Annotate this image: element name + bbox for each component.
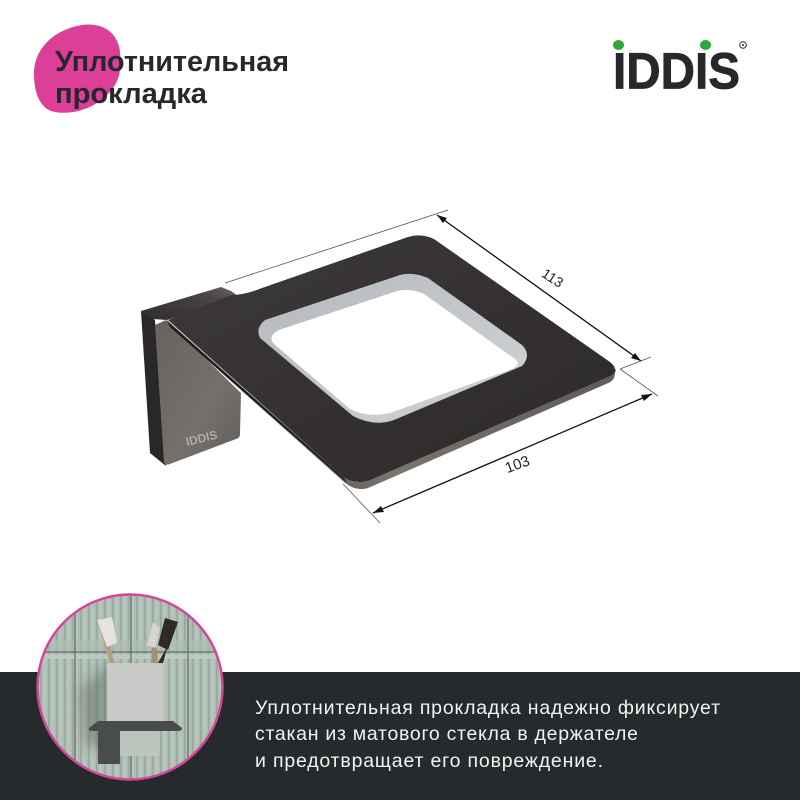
logo: IDDIS: IDDIS bbox=[613, 42, 740, 100]
glass cup bbox=[107, 663, 163, 725]
bracket top bbox=[141, 287, 238, 320]
title bbox=[55, 46, 289, 110]
dimension 113: 113 bbox=[539, 265, 567, 291]
bottom dark band bbox=[0, 672, 800, 800]
toothbrush middle bbox=[151, 647, 158, 663]
description text: стакан из матового стекла в держателе bbox=[255, 723, 638, 745]
dimension 113 bbox=[225, 210, 651, 369]
dimension 103: 103 bbox=[503, 453, 532, 477]
toothbrush dark bbox=[158, 649, 167, 663]
bracket side bbox=[141, 311, 166, 466]
tile wall bbox=[36, 593, 226, 783]
shadow on wall bbox=[80, 660, 110, 750]
shelf bracket bbox=[98, 731, 120, 764]
bracket logo: IDDIS bbox=[184, 428, 219, 449]
title: Уплотнительная bbox=[55, 46, 289, 78]
description text: Уплотнительная прокладка надежно фиксирует bbox=[255, 697, 720, 719]
description text: и предотвращает его повреждение. bbox=[255, 750, 603, 772]
plate top bbox=[168, 235, 615, 482]
lower glass bbox=[120, 731, 160, 756]
title: прокладка bbox=[55, 78, 208, 110]
plate edge bbox=[167, 320, 616, 489]
description text bbox=[255, 697, 720, 772]
bracket front face bbox=[155, 320, 241, 465]
glass frame bbox=[258, 274, 527, 423]
glass opening bbox=[271, 290, 518, 415]
shelf bbox=[89, 721, 182, 731]
product: shelf holder bbox=[141, 235, 616, 489]
dimension 103 bbox=[343, 369, 658, 523]
pink blob behind title bbox=[34, 24, 121, 113]
thumbnail photo circle bbox=[36, 593, 226, 783]
toothbrush left bbox=[97, 618, 114, 663]
